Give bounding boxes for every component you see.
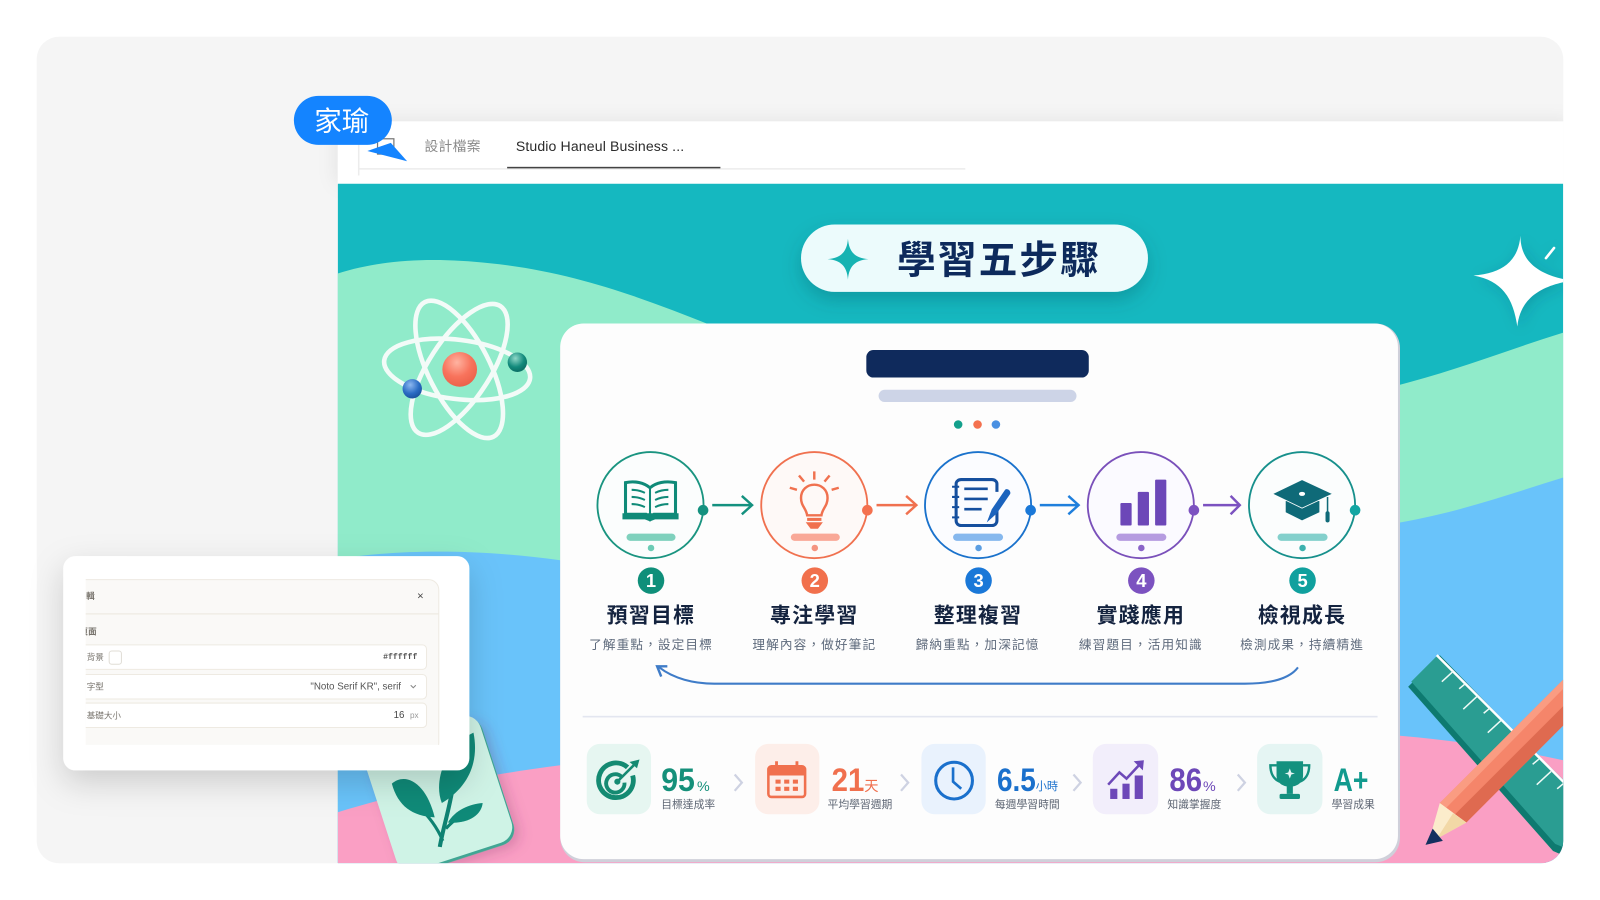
row: font: 字型 — [87, 680, 104, 692]
title pill — [801, 224, 1148, 292]
arrow — [1040, 496, 1079, 514]
row: background: #ffffff — [383, 652, 417, 662]
wave: mint — [338, 260, 1563, 633]
step description: 了解重點，設定目標 — [589, 634, 713, 653]
header bar placeholder — [866, 350, 1089, 378]
step description: 歸納重點，加深記憶 — [916, 634, 1039, 653]
teal background — [338, 184, 1563, 863]
chevron — [1073, 774, 1081, 791]
badge — [965, 567, 992, 594]
infographic artwork — [338, 184, 1571, 878]
row: base size — [71, 703, 427, 728]
tab: active file: Studio Haneul Business ... — [516, 138, 684, 154]
subtitle bar placeholder — [879, 390, 1077, 402]
stat: study cycle: 平均學習週期 — [828, 796, 892, 812]
badge: 1 — [646, 570, 656, 591]
row: base size: 16 — [394, 710, 404, 721]
badge: 3 — [973, 570, 984, 591]
step description: 練習題目，活用知識 — [1079, 634, 1203, 653]
settings panel — [63, 556, 469, 770]
stat: results — [1257, 744, 1375, 814]
chevron — [735, 774, 742, 791]
stat: mastery — [1093, 744, 1245, 814]
step name: 實踐應用 — [1097, 599, 1185, 629]
stat: goal rate: 目標達成率 — [661, 796, 715, 812]
icon: calendar — [768, 761, 805, 797]
stat: mastery: 86 — [1169, 761, 1202, 798]
step 2 — [752, 452, 916, 653]
cursor arrow — [367, 143, 407, 161]
icon: target — [599, 760, 639, 798]
badge — [1128, 567, 1155, 594]
icon: notebook and pen — [952, 480, 1010, 526]
badge — [638, 567, 664, 594]
icon: atom — [382, 298, 532, 440]
pagination dots — [954, 420, 1000, 429]
arrow — [877, 496, 916, 514]
row: font: "Noto Serif KR", serif — [310, 681, 401, 692]
stat: weekly hours: 每週學習時間 — [995, 796, 1060, 812]
step name: 檢視成長 — [1258, 599, 1346, 629]
close icon: × — [417, 590, 424, 602]
icon: light bulb — [790, 471, 839, 528]
stat: results: A+ — [1334, 761, 1368, 798]
title: 學習五步驟 — [897, 229, 1101, 285]
stat: weekly hours: 6.5 — [997, 761, 1036, 798]
step 1 — [589, 452, 752, 653]
stat: goal rate — [587, 744, 742, 814]
row: base size: px — [410, 711, 419, 720]
row: font — [71, 674, 427, 699]
icon: pencil — [1426, 680, 1563, 845]
arrow — [712, 496, 752, 514]
icon: open book — [622, 482, 679, 521]
step name: 預習目標 — [607, 599, 695, 629]
stat: study cycle — [755, 744, 908, 814]
stat: goal rate: 95 — [661, 761, 695, 798]
stat: weekly hours — [921, 744, 1081, 814]
stat: study cycle: 天 — [864, 775, 879, 796]
icon: bar chart — [1120, 480, 1166, 526]
stat: results: 學習成果 — [1332, 796, 1375, 812]
step 5 — [1240, 452, 1364, 653]
badge — [1289, 567, 1316, 594]
step name: 專注學習 — [770, 599, 859, 629]
step 3 — [916, 452, 1079, 653]
row: background: 背景 — [87, 651, 104, 663]
user cursor tag: 家瑜 — [314, 99, 369, 139]
icon: plant tile — [367, 716, 524, 864]
section label: 頁面 — [80, 626, 97, 638]
icon: teal sparkle — [828, 239, 868, 280]
badge: 2 — [810, 570, 820, 591]
badge: 4 — [1136, 570, 1147, 591]
window chrome — [338, 121, 1572, 185]
screenshot window — [338, 121, 1572, 878]
tab: design files: 設計檔案 — [424, 135, 481, 155]
step description: 檢測成果，持續精進 — [1240, 634, 1364, 653]
row: background — [71, 645, 427, 669]
row: base size: 基礎大小 — [87, 709, 121, 721]
step description: 理解內容，做好筆記 — [752, 634, 876, 653]
stat: mastery: 知識掌握度 — [1167, 796, 1222, 812]
icon: trophy — [1270, 761, 1309, 799]
wave: blue — [338, 478, 1563, 863]
icon: growth chart — [1108, 760, 1144, 799]
icon: graduation cap — [1272, 480, 1333, 522]
panel header: 編輯 — [78, 590, 95, 602]
user cursor tag — [294, 96, 407, 161]
step 4 — [1079, 452, 1240, 653]
stat: mastery: % — [1203, 779, 1216, 795]
stat: goal rate: % — [697, 779, 710, 795]
chevron — [901, 774, 908, 791]
icon: ruler — [1408, 655, 1567, 857]
stat: study cycle: 21 — [832, 761, 864, 798]
main white panel — [560, 323, 1400, 862]
badge — [802, 567, 828, 594]
chevron — [1238, 774, 1245, 791]
icon: clock — [936, 762, 972, 799]
return arrow — [657, 666, 1298, 684]
stat: weekly hours: 小時 — [1036, 778, 1058, 794]
icon: white sparkle — [1473, 236, 1571, 327]
name bubble — [294, 96, 392, 145]
badge: 5 — [1297, 570, 1308, 591]
arrow — [1203, 496, 1240, 514]
step name: 整理複習 — [934, 599, 1022, 629]
wave: pink — [338, 736, 1563, 863]
